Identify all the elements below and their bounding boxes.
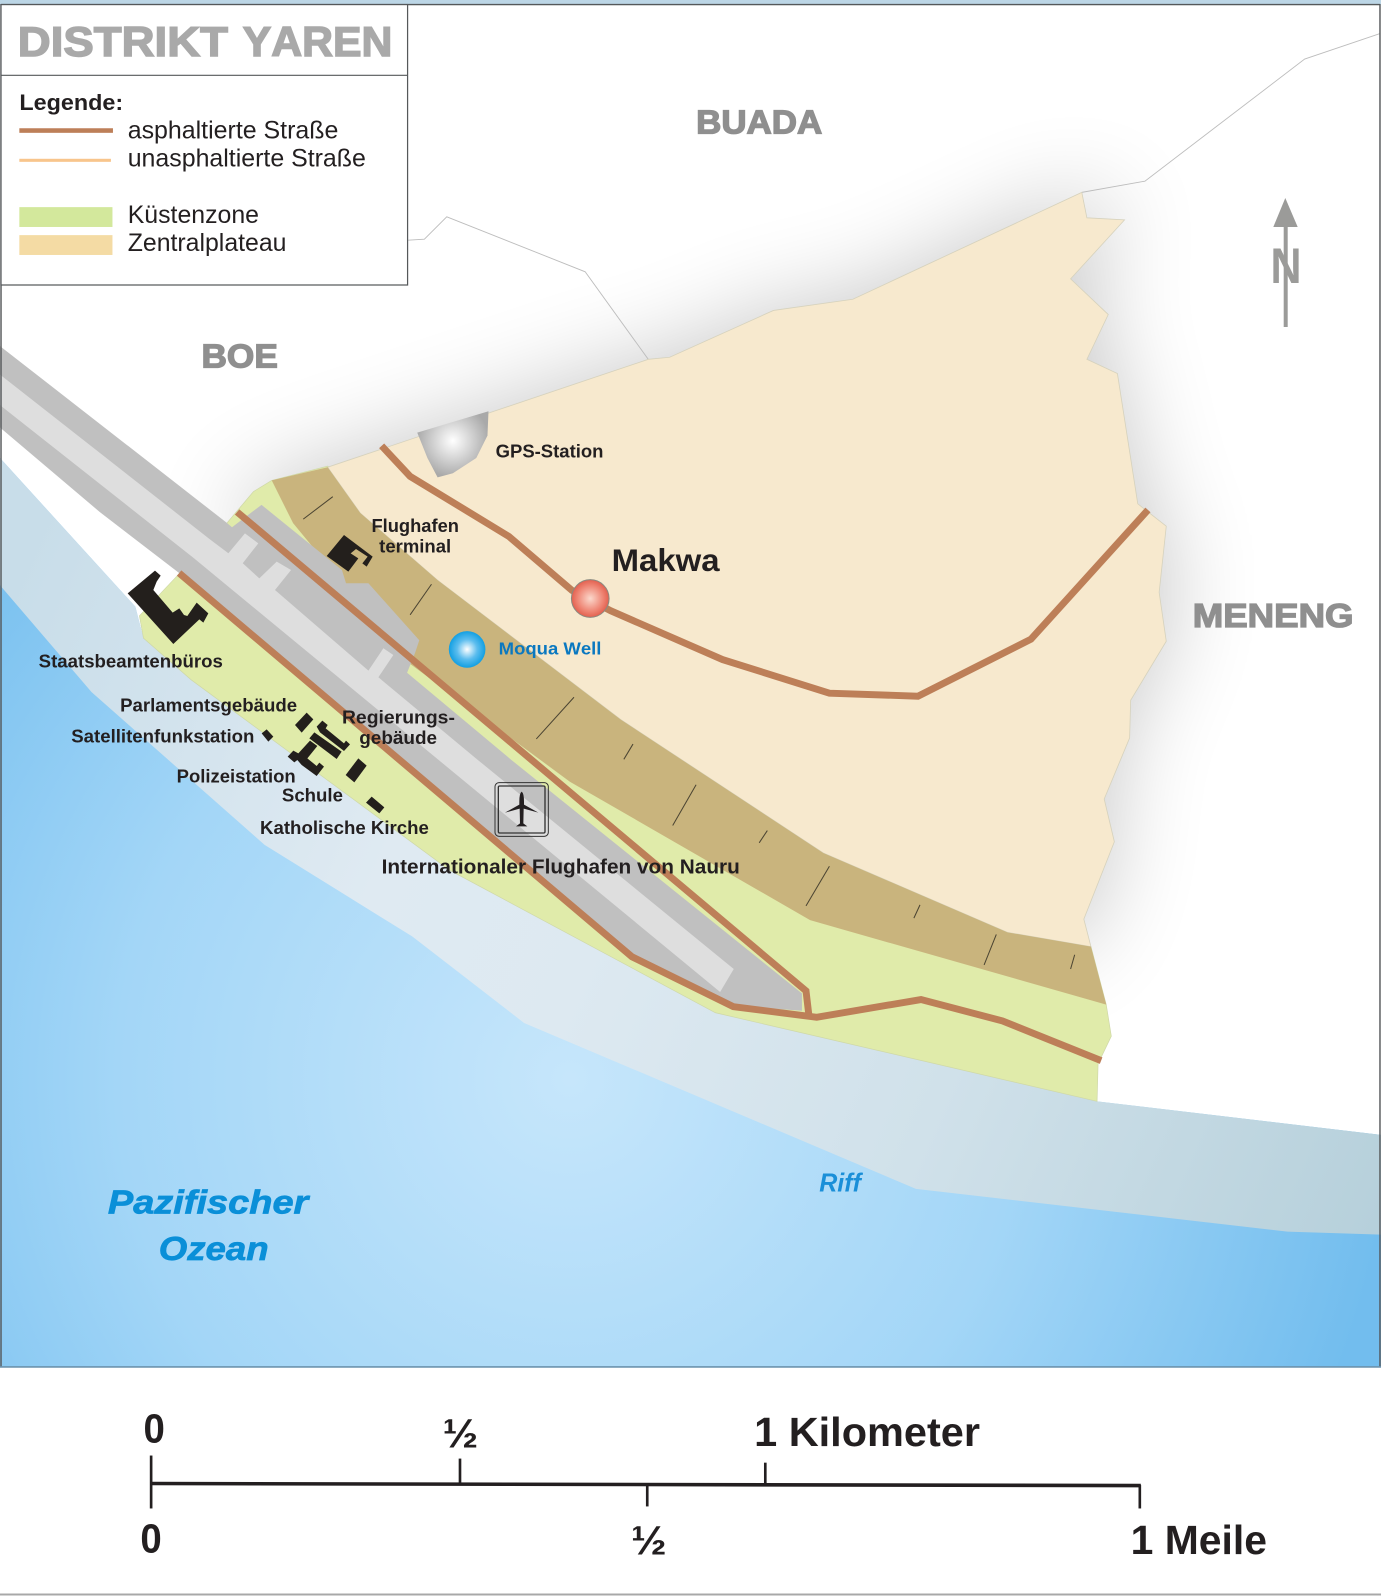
building: Flughafenterminal: [327, 535, 373, 572]
GPS station dish: [417, 411, 488, 477]
label: Flughafenterminal: [371, 515, 459, 557]
label: GPS-Station: GPS-Station: [496, 441, 603, 462]
legend: plateau swatch: [19, 235, 112, 255]
label: Pazifischer Ozean: [108, 1184, 311, 1268]
legend: paved road line: [19, 128, 113, 133]
label: Flughafenterminal: Flughafen: [371, 515, 459, 536]
legend: coastal zone label: Küstenzone: [128, 201, 259, 229]
runway light strip: [0, 375, 734, 992]
district label: Meneng: MENENG: [1193, 598, 1354, 635]
scale: mile 0: 0: [140, 1516, 162, 1562]
title: YAREN: [243, 18, 392, 65]
label: Parlamentsgebaeude: Parlamentsgebäude: [120, 694, 297, 715]
label: Riff: Riff: [819, 1169, 863, 1197]
legend: unpaved road line: [19, 159, 111, 162]
district label: Boe: BOE: [202, 338, 278, 375]
compass north arrow: N: [1270, 238, 1301, 294]
paved road: coast: [179, 573, 1101, 1061]
district label: Buada: BUADA: [696, 104, 822, 141]
building: Staatsbeamtenbueros: [128, 571, 208, 644]
label: Staatsbeamtenbueros: Staatsbeamtenbüros: [39, 651, 223, 672]
label: Katholische Kirche: Katholische Kirche: [260, 817, 429, 838]
legend panel: [1, 5, 408, 285]
escarpment tick marks: [303, 497, 1075, 969]
label: Flughafenterminal: terminal: [379, 536, 451, 557]
coastal zone: [139, 466, 1111, 1101]
label: Pazifischer Ozean: Pazifischer: [108, 1184, 311, 1221]
legend: paved road label: asphaltierte Straße: [128, 116, 338, 144]
central plateau: [328, 192, 1166, 947]
scale: kilometre 0: 0: [143, 1405, 165, 1451]
label: Makwa: Makwa: [612, 542, 720, 578]
paved road: airport north: [237, 512, 809, 1017]
label: Moqua Well: Moqua Well: [499, 638, 601, 658]
label: Satellitenfunkstation: Satellitenfunkstation: [71, 726, 254, 747]
label: Regierungsgebaeude: gebäude: [359, 727, 437, 748]
scale: 1 Meile: 1 Meile: [1131, 1517, 1267, 1563]
compass north arrow: [1270, 198, 1301, 327]
label: Polizeistation: Polizeistation: [177, 766, 296, 787]
label: Pazifischer Ozean: Ozean: [159, 1231, 269, 1268]
scale: half mile: ½: [631, 1517, 667, 1563]
plateau escarpment band: [272, 467, 1106, 1005]
reef: [0, 458, 1381, 1235]
icon: airplane sign: [495, 783, 548, 836]
title: DISTRIKT: [18, 18, 229, 65]
scale bar: [140, 1405, 1267, 1563]
label: Internationaler Flughafen von Nauru: Internationaler Flughafen von Nauru: [382, 856, 740, 878]
label: Regierungsgebaeude: Regierungs-: [342, 707, 455, 728]
legend: plateau label: Zentralplateau: [128, 229, 286, 257]
district boundary lines: [408, 34, 1380, 359]
airport runway and apron: [0, 346, 802, 1011]
label: Schule: Schule: [282, 785, 343, 806]
Moqua Well marker: [449, 631, 485, 668]
title: [18, 18, 392, 65]
government compound buildings: [262, 713, 384, 813]
paved road: Makwa: [382, 446, 1148, 696]
Makwa marker: [571, 580, 609, 617]
legend: unpaved road label: unasphaltierte Straße: [128, 144, 366, 172]
scale: 1 Kilometer: 1 Kilometer: [754, 1409, 980, 1455]
buildings: [128, 535, 384, 813]
label: Regierungsgebaeude: [342, 707, 455, 748]
legend: coastal zone swatch: [19, 207, 112, 227]
scale: half kilometre: ½: [443, 1410, 478, 1456]
ocean: [0, 458, 1381, 1367]
legend heading: Legende:: [19, 90, 123, 115]
